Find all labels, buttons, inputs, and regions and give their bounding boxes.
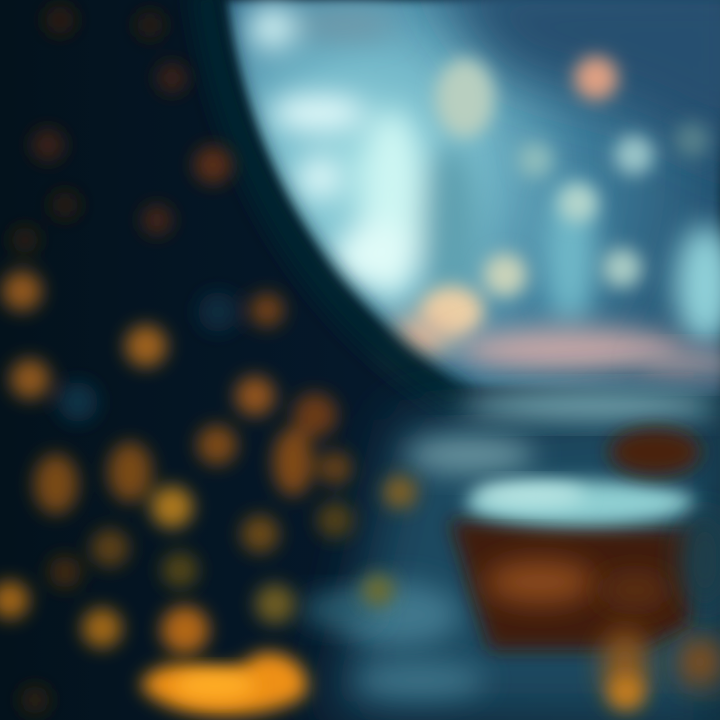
bright orange glow shape at bottom: [140, 606, 307, 715]
light streaks inside sphere: [248, 6, 720, 345]
sphere: glowing blue lens: [225, 0, 720, 395]
sphere dark rim: [205, 0, 465, 405]
sphere bokeh lights: [420, 56, 710, 338]
brown cup: [450, 428, 720, 710]
lower water: [300, 391, 720, 720]
orange bokeh dots: [0, 5, 417, 714]
pink horizon band: [455, 328, 685, 372]
sphere top right darker blue: [430, 0, 720, 170]
